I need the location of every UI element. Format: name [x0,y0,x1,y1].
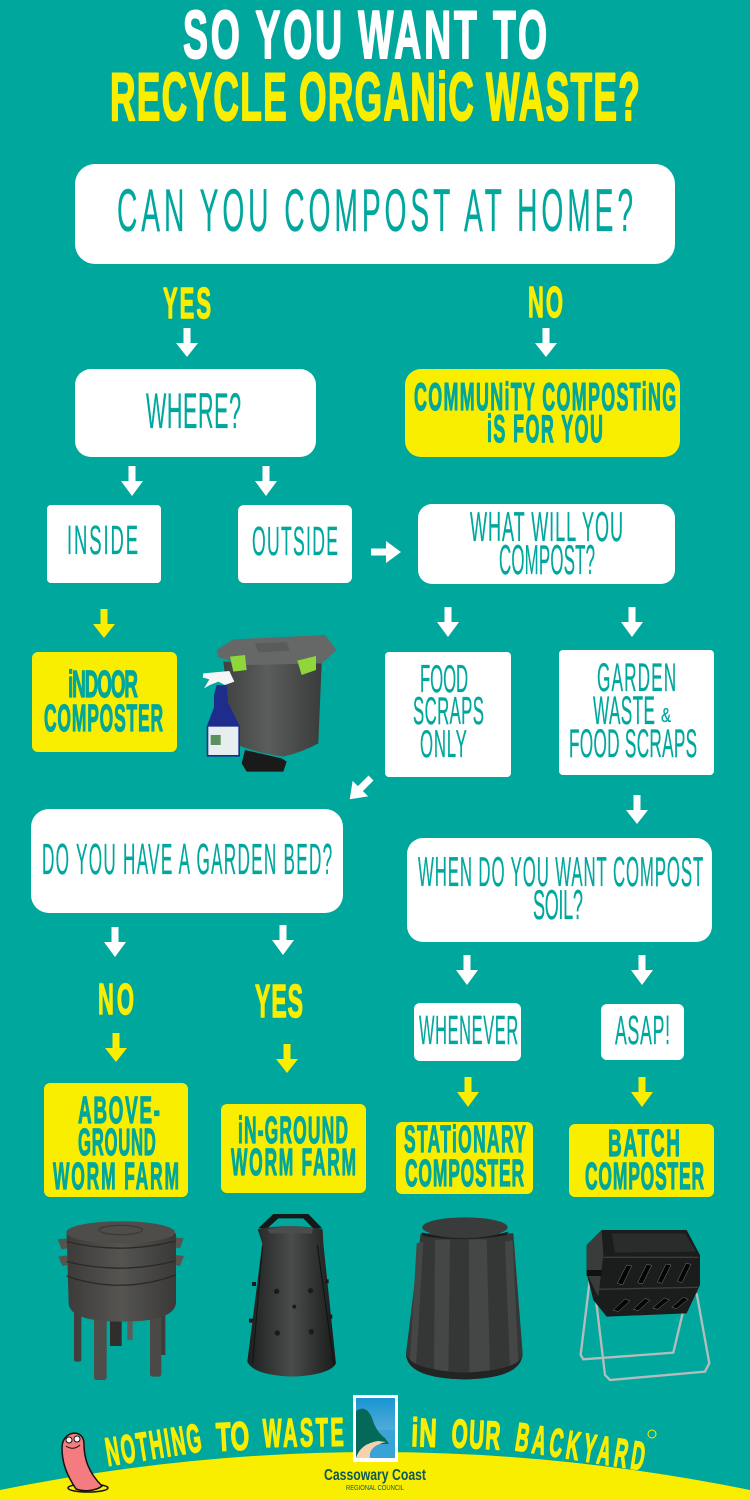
question: when do you want compost soil [407,838,712,942]
title [110,0,640,135]
answer: stationary composter: COMPOSTER [405,1153,524,1195]
image: batch composter [581,1230,709,1380]
arrow: to inside [121,466,143,496]
arrow: yes down [176,328,198,357]
option: garden waste and food scraps [559,650,714,775]
slogan: nothing to waste in our backyard: WASTE [262,1409,344,1456]
ground: yellow hill [0,1452,750,1500]
arrow: no down [535,328,557,357]
option: garden waste and food scraps: & [661,705,671,727]
answer: indoor composter [32,652,177,752]
icon: worm [62,1433,108,1492]
slogan: nothing to waste in our backyard: OUR [451,1411,502,1458]
slogan: nothing to waste in our backyard: NOTHING [102,1415,204,1475]
option: asap [601,1004,684,1060]
question: do you have a garden bed [31,809,343,913]
title: RECYCLE ORGANiC WASTE? [110,60,640,135]
arrow: garden bed no [104,927,126,957]
question: what will you compost: WHAT WILL YOU [470,503,623,550]
question: when do you want compost soil: WHEN DO YOU WANT COMPOST [418,848,703,895]
question: when do you want compost soil: SOIL? [533,881,583,928]
question: do you have a garden bed: DO YOU HAVE A GARDEN BED? [42,836,332,885]
label: no garden bed: NO [98,976,134,1024]
answer: above-ground worm farm [44,1083,188,1198]
answer: stationary composter: STATiONARY [404,1119,526,1161]
answer: in-ground worm farm: iN-GROUND [238,1110,348,1152]
option: outside: OUTSIDE [252,517,338,564]
arrow: asap to batch [631,1077,653,1107]
question: what will you compost: COMPOST? [499,536,595,583]
option: asap: ASAP! [615,1006,670,1053]
question: what will you compost [418,503,675,584]
arrow: yes to in-ground [276,1044,298,1073]
answer: community composting: iS FOR YOU [487,409,603,451]
answer: batch composter [569,1123,714,1198]
option: inside [47,505,161,583]
arrow: inside down [93,609,115,638]
answer: above-ground worm farm: WORM FARM [53,1156,179,1198]
answer: community composting [405,369,680,457]
image: indoor composter kit [203,635,337,772]
option: whenever: WHENEVER [419,1007,518,1053]
answer: above-ground worm farm: GROUND [78,1121,156,1164]
arrow: to outside [255,466,277,496]
arrow: no to above-ground [105,1033,127,1062]
slogan: nothing to waste in our backyard [102,1409,648,1479]
slogan: nothing to waste in our backyard: TO [215,1413,250,1459]
image: stationary composter [406,1217,523,1379]
trademark mark [648,1430,656,1438]
option: food scraps only: ONLY [420,723,467,766]
answer: in-ground worm farm: WORM FARM [231,1142,356,1184]
image: in-ground worm farm [247,1214,336,1377]
arrow: food scraps down [437,607,459,637]
option: inside: INSIDE [67,517,138,563]
label: no: NO [528,279,563,327]
arrow: outside to what [371,541,401,563]
option: garden waste and food scraps: GARDEN [597,655,676,700]
arrow: asap [631,955,653,985]
arrow: garden waste to when [626,795,648,824]
arrow: whenever to stationary [457,1077,479,1107]
option: food scraps only [385,652,511,777]
answer: community composting: COMMUNiTY COMPOSTiNG [414,377,676,419]
answer: indoor composter: iNDOOR [68,664,138,706]
answer: batch composter: COMPOSTER [585,1156,704,1198]
answer: in-ground worm farm [221,1104,366,1193]
option: garden waste and food scraps: WASTE [593,688,655,733]
answer: indoor composter: COMPOSTER [44,698,163,740]
label: yes garden bed: YES [255,975,303,1027]
question: where: WHERE? [146,384,241,440]
option: food scraps only: FOOD [420,658,468,701]
logo text: Cassowary Coast [324,1467,427,1484]
answer: batch composter: BATCH [608,1123,680,1165]
image: above-ground worm farm [58,1221,184,1380]
arrow: whenever [456,955,478,985]
question: where [75,369,316,457]
answer: stationary composter [396,1119,533,1195]
arrow: food scraps diagonal [342,770,379,807]
slogan: nothing to waste in our backyard: BACKYARD [513,1414,648,1479]
logo text: REGIONAL COUNCIL [346,1485,404,1492]
option: outside [238,505,352,583]
option: garden waste and food scraps: FOOD SCRAPS [569,721,697,766]
logo: cassowary coast [353,1395,398,1462]
label: yes: YES [163,280,211,328]
question: can you compost at home [75,164,675,264]
option: food scraps only: SCRAPS [413,690,484,733]
arrow: garden waste down [621,607,643,637]
slogan: nothing to waste in our backyard: iN [411,1410,437,1455]
arrow: garden bed yes [272,925,294,955]
logo text [324,1467,427,1492]
question: can you compost at home: CAN YOU COMPOST AT HOME? [117,177,633,244]
answer: above-ground worm farm: ABOVE- [78,1090,160,1132]
